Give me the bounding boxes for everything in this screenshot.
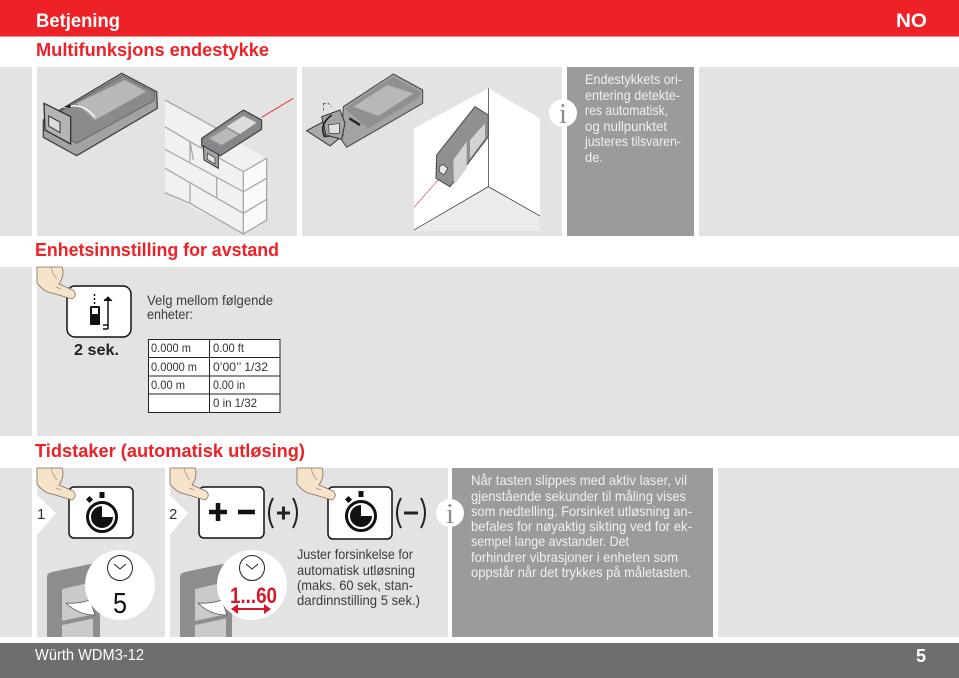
info text: som nedtelling. Forsinket utløsning an-	[471, 503, 692, 519]
info text: og nullpunktet	[585, 118, 667, 134]
info text: gjenstående sekunder til måling vises	[471, 488, 686, 504]
step number 2: 2	[169, 506, 177, 523]
table of units: 0 in 1/32	[213, 396, 257, 410]
illustration: device in corner with laser	[414, 107, 488, 207]
panel: step 1	[37, 468, 165, 637]
info text: entering detekte-	[585, 87, 680, 103]
heading: timer: Tidstaker (automatisk utløsing)	[35, 441, 305, 461]
button: plus minus	[199, 487, 264, 538]
panel: info note end piece	[549, 67, 694, 236]
panel: info note timer	[436, 468, 713, 637]
info text: befales for nøyaktig sikting ved for ek-	[471, 518, 692, 534]
panel: distance unit setting	[0, 267, 959, 436]
icon: finger press	[297, 468, 335, 500]
instruction text	[147, 292, 273, 322]
device display	[180, 562, 232, 637]
panel: step 2	[169, 468, 448, 637]
button: distance unit	[67, 286, 131, 337]
info text	[471, 472, 692, 580]
step text: (maks. 60 sek, stan-	[297, 577, 413, 593]
band left margin and right	[0, 468, 959, 637]
button: timer	[69, 487, 133, 538]
illustration: brick wall	[165, 100, 267, 234]
info text: res automatisk,	[585, 102, 668, 118]
label: minus	[397, 498, 425, 528]
heading: multifunction end piece: Multifunksjons endestykke	[36, 40, 269, 60]
section band 1	[0, 67, 959, 236]
footer model name: Würth WDM3-12	[35, 647, 144, 664]
step text: Juster forsinkelse for	[297, 546, 413, 562]
icon: finger press	[170, 468, 208, 500]
illustration: device on wall with laser	[202, 98, 293, 168]
illustration: device with folded end piece	[307, 74, 423, 147]
step text: dardinnstilling 5 sek.)	[297, 592, 420, 608]
icon: info: i	[559, 99, 567, 130]
language code: NO	[896, 11, 927, 32]
table of units: 0.00 in	[213, 378, 245, 392]
table of units: 0.000 m	[151, 341, 191, 355]
chevron: step 1	[37, 495, 56, 535]
info text	[584, 71, 682, 165]
label: 2 seconds: 2 sek.	[74, 342, 119, 359]
illustration: device with end piece	[43, 73, 157, 156]
icon: finger press	[37, 468, 75, 500]
icon: finger press	[37, 267, 75, 299]
table of units: 0.0000 m	[151, 360, 197, 374]
icon: info	[549, 99, 577, 130]
table of units: 0.00 ft	[213, 341, 245, 355]
step text	[297, 546, 420, 608]
callout: 1...60: 1...60	[230, 583, 277, 608]
callout: 1...60	[198, 550, 287, 620]
table of units: 0.00 m	[151, 378, 185, 392]
page number: 5	[916, 646, 926, 666]
info text: sempel lange avstander. Det	[471, 533, 629, 549]
button: timer	[328, 487, 392, 539]
panel: end piece orientation and corner	[302, 67, 562, 236]
panel: device flip and wall	[37, 67, 297, 236]
info text: forhindrer vibrasjoner i enheten som	[471, 549, 678, 565]
label: plus	[269, 498, 297, 528]
chevron: step 2	[170, 495, 188, 535]
info text: justeres tilsvaren-	[584, 133, 681, 149]
table of units	[148, 340, 280, 412]
callout: 5 seconds	[66, 550, 155, 620]
instruction text: Velg mellom følgende	[147, 292, 273, 308]
info text: de.	[585, 149, 603, 165]
header title: Betjening	[36, 11, 120, 32]
footer bar	[0, 643, 959, 678]
info text: Endestykkets ori-	[585, 71, 682, 87]
instruction text: enheter:	[147, 306, 193, 322]
header bar	[0, 0, 959, 36]
step number 1: 1	[37, 506, 45, 523]
info text: Når tasten slippes med aktiv laser, vil	[471, 472, 687, 488]
step text: automatisk utløsning	[297, 562, 415, 578]
heading: distance unit setting: Enhetsinnstilling for avstand	[35, 240, 279, 260]
icon: info: i	[446, 499, 454, 530]
table of units: 0’00’’ 1/32	[213, 360, 268, 374]
device display	[47, 562, 100, 637]
callout: 5 seconds: 5	[113, 588, 127, 620]
info text: oppstår når det trykkes på måletasten.	[471, 564, 691, 580]
icon: info	[436, 499, 464, 530]
illustration: room corner	[414, 88, 540, 231]
